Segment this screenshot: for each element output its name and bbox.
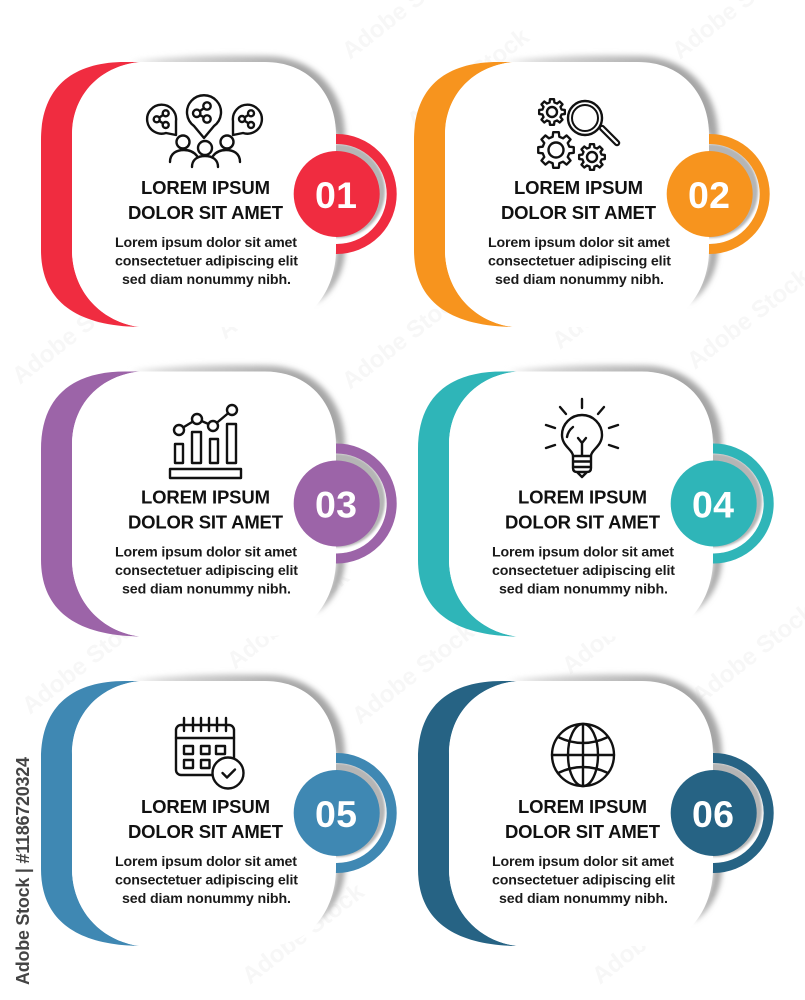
panel: step 03: Lorem ipsum dolor sit amet xyxy=(115,544,297,560)
panel: step 04: LOREM IPSUM xyxy=(518,486,647,508)
panel: step 06: 06 xyxy=(692,793,734,835)
panel: step 02: 02 xyxy=(688,174,730,216)
panel: step 02: Lorem ipsum dolor sit amet xyxy=(488,235,670,251)
watermark: Adobe Stock xyxy=(212,233,345,345)
watermark: Adobe Stock xyxy=(347,618,480,730)
watermark: Adobe Stock xyxy=(337,283,470,395)
icon: light bulb xyxy=(546,399,618,477)
icon: bar chart with trend line xyxy=(170,405,241,478)
panel: step 02: sed diam nonummy nibh. xyxy=(495,272,664,288)
panel: step 06: LOREM IPSUM xyxy=(518,796,647,817)
watermark: Adobe Stock xyxy=(402,23,535,135)
panel: step 01: Lorem ipsum dolor sit amet xyxy=(115,235,297,251)
panel: step 01: DOLOR SIT AMET xyxy=(128,202,284,223)
panel: step 04: consectetuer adipiscing elit xyxy=(492,563,675,579)
icon: gears and magnifier xyxy=(538,99,617,170)
icon: calendar with check xyxy=(176,718,244,788)
panel: step 04: 04 xyxy=(692,484,734,526)
watermark: Adobe Stock xyxy=(7,278,140,390)
panel: step 04: Lorem ipsum dolor sit amet xyxy=(492,544,674,560)
watermark: Adobe Stock xyxy=(47,53,180,165)
panel: step 05 xyxy=(41,675,392,946)
panel: step 01: 01 xyxy=(315,174,357,216)
panel: step 02: LOREM IPSUM xyxy=(514,177,643,198)
panel: step 03: DOLOR SIT AMET xyxy=(128,512,284,532)
watermark: Adobe Stock xyxy=(237,878,370,990)
panel: step 06: DOLOR SIT AMET xyxy=(505,821,661,842)
panel: step 05: Lorem ipsum dolor sit amet xyxy=(115,854,297,870)
stock credit: Adobe Stock | #1186720324 xyxy=(13,757,33,985)
panel: step 03: sed diam nonummy nibh. xyxy=(122,582,291,598)
panel: step 03: 03 xyxy=(315,484,357,526)
panel: step 05: sed diam nonummy nibh. xyxy=(122,891,291,907)
panel: step 05: LOREM IPSUM xyxy=(141,796,270,817)
panel: step 06: consectetuer adipiscing elit xyxy=(492,872,675,888)
panel: step 05: 05 xyxy=(315,793,357,835)
watermark: Adobe Stock xyxy=(17,608,150,720)
panel: step 03: LOREM IPSUM xyxy=(141,486,270,508)
watermark: Adobe Stock xyxy=(547,243,680,355)
panel: step 03: consectetuer adipiscing elit xyxy=(115,563,298,579)
panel: step 02: consectetuer adipiscing elit xyxy=(488,254,671,270)
panel: step 06: Lorem ipsum dolor sit amet xyxy=(492,854,674,870)
panel: step 04: sed diam nonummy nibh. xyxy=(499,582,668,598)
watermark: Adobe Stock xyxy=(222,563,355,675)
panel: step 02 xyxy=(414,56,765,327)
panel: step 06: sed diam nonummy nibh. xyxy=(499,891,668,907)
panel: step 01: sed diam nonummy nibh. xyxy=(122,272,291,288)
watermark: Adobe Stock xyxy=(587,878,720,990)
panel: step 01: LOREM IPSUM xyxy=(141,177,270,198)
panel: step 01 xyxy=(41,56,392,327)
icon: people sharing xyxy=(147,95,262,167)
panel: step 05: consectetuer adipiscing elit xyxy=(115,872,298,888)
watermark: Adobe Stock xyxy=(557,568,690,680)
panel: step 06 xyxy=(418,675,769,946)
panel: step 02: DOLOR SIT AMET xyxy=(501,202,657,223)
icon: globe xyxy=(552,724,614,786)
panel: step 01: consectetuer adipiscing elit xyxy=(115,254,298,270)
panel: step 03 xyxy=(41,365,392,636)
panel: step 04: DOLOR SIT AMET xyxy=(505,512,661,532)
panel: step 04 xyxy=(418,365,769,636)
panel: step 05: DOLOR SIT AMET xyxy=(128,821,284,842)
